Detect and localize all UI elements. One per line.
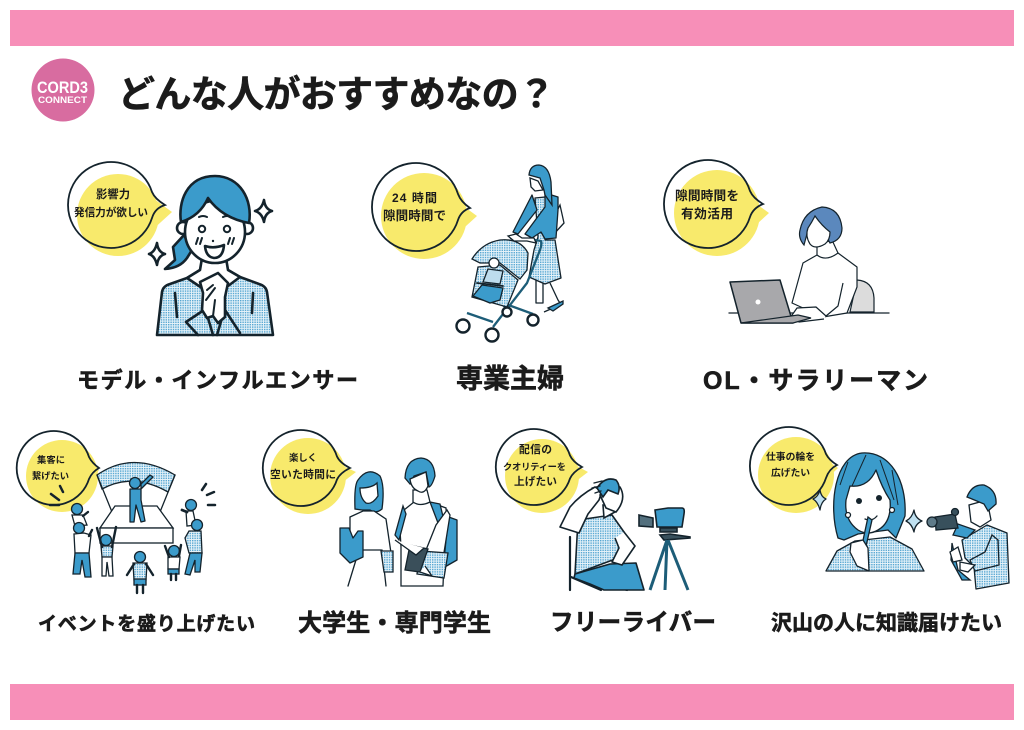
- speech bubble: [68, 162, 172, 256]
- label: model / influencer: モデル・インフルエンサー: [77, 368, 358, 393]
- speech bubble: [263, 430, 356, 514]
- speech bubble: 影響力: [96, 187, 130, 201]
- title: どんな人がおすすめなの？: [118, 74, 555, 115]
- speech bubble: [17, 431, 99, 512]
- speech bubble: 空いた時間に: [270, 467, 336, 481]
- illustration: woman at laptop: [729, 207, 889, 323]
- panel: spread knowledge: [750, 427, 1009, 589]
- illustration: streamer with camera: [560, 479, 690, 590]
- panel: housewife: [372, 163, 564, 342]
- bottom pink band: [10, 684, 1014, 720]
- illustration: smiling woman: [149, 176, 273, 335]
- logo badge: CORD3: [37, 78, 88, 97]
- speech bubble: 有効活用: [681, 206, 733, 221]
- logo badge: [32, 58, 94, 122]
- speech bubble: 発信力が欲しい: [74, 206, 148, 219]
- speech bubble: [372, 163, 477, 259]
- illustration: woman with stroller: [456, 165, 564, 342]
- label: live streamer: フリーライバー: [550, 609, 716, 635]
- speech bubble: [496, 429, 588, 513]
- speech bubble: 繋げたい: [32, 470, 69, 481]
- illustration: crowd and stage: [72, 462, 215, 593]
- panel: model / influencer: [68, 162, 273, 335]
- panel: office worker: [664, 160, 889, 323]
- speech bubble: 24 時間: [392, 190, 437, 205]
- speech bubble: 広げたい: [771, 466, 810, 479]
- top pink band: [10, 10, 1014, 46]
- panel: students: [263, 430, 457, 586]
- label: event: イベントを盛り上げたい: [38, 612, 255, 635]
- speech bubble: 集客に: [37, 454, 65, 465]
- illustration: two students: [340, 458, 457, 586]
- label: office worker: OL・サラリーマン: [703, 367, 928, 395]
- label: students: 大学生・専門学生: [298, 610, 491, 637]
- speech bubble: [750, 427, 838, 513]
- logo badge: CONNECT: [38, 95, 88, 105]
- label: spread knowledge: 沢山の人に知識届けたい: [771, 612, 1002, 635]
- panel: live streamer: [496, 429, 690, 590]
- panel: event: [17, 431, 215, 593]
- speech bubble: 上げたい: [514, 475, 557, 488]
- speech bubble: 仕事の輪を: [766, 450, 815, 463]
- speech bubble: クオリティーを: [503, 462, 566, 472]
- illustration: woman and cameraman: [813, 453, 1009, 589]
- speech bubble: 配信の: [519, 442, 552, 456]
- speech bubble: 楽しく: [289, 452, 317, 464]
- label: housewife: 専業主婦: [456, 364, 564, 394]
- speech bubble: [664, 160, 769, 256]
- speech bubble: 隙間時間を: [675, 188, 739, 203]
- speech bubble: 隙間時間で: [383, 208, 446, 223]
